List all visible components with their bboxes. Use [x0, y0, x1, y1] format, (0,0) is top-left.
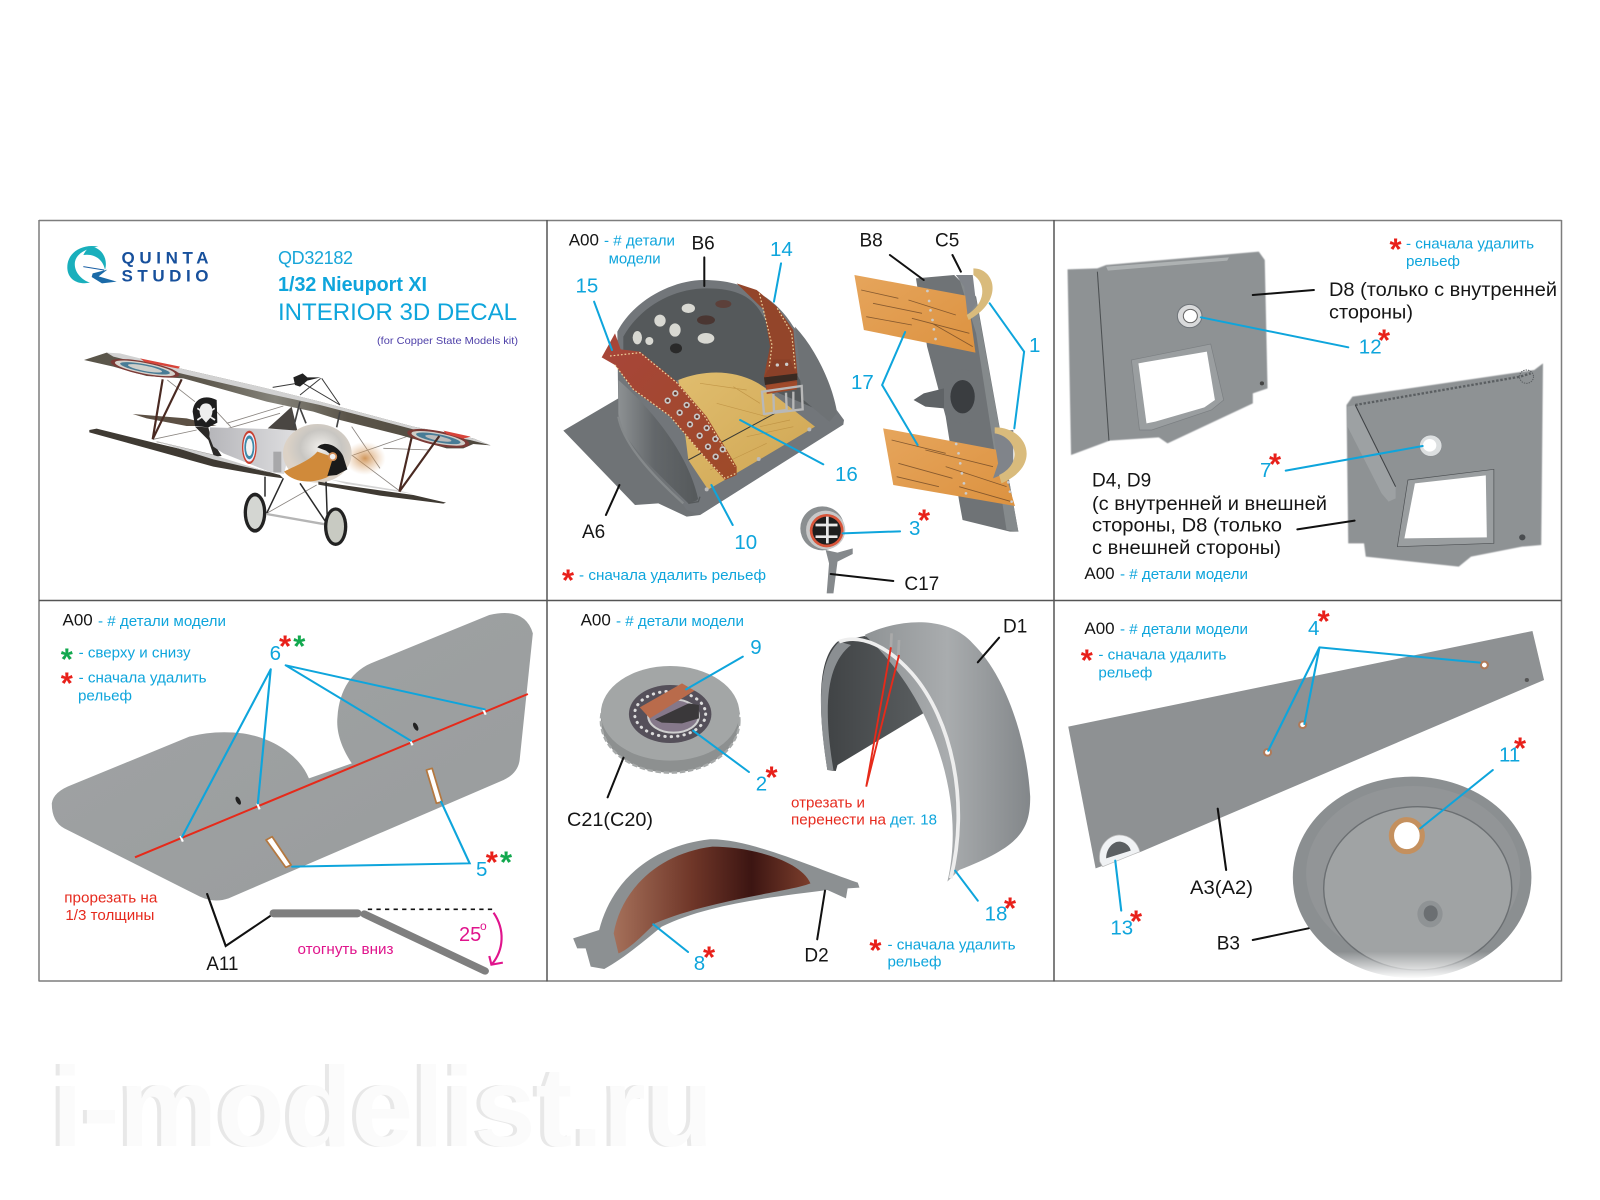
part labels: disc and cowl: * — [703, 940, 716, 974]
legend: remove relief first: * — [562, 562, 575, 598]
legend: part numbers note: A00 — [569, 231, 599, 250]
panel: seat, rudder bar, instrument — [562, 231, 1040, 597]
number: 5 with asterisks — [476, 844, 513, 881]
part labels: wing and round panel: B3 — [1217, 933, 1240, 954]
leader lines: panel callouts — [1201, 290, 1423, 529]
part labels: disc and cowl: 2 — [756, 773, 767, 796]
note: cut a third of thickness — [64, 890, 158, 924]
note: cut and transfer to part 18: дет. 18 — [890, 811, 937, 828]
legend: remove relief first — [869, 932, 1016, 971]
panel: title and aircraft — [67, 246, 518, 546]
legend: remove relief first: * — [1081, 642, 1094, 678]
label: D8 inner side: D8 (только с внутренней — [1329, 280, 1557, 301]
number: 5 with asterisks: * — [500, 844, 513, 880]
part labels: seat and rudder bar: 14 — [770, 238, 793, 261]
product code: QD32182 — [278, 248, 353, 268]
part labels: seat and rudder bar: 17 — [851, 371, 874, 394]
part labels: disc and cowl — [567, 617, 1027, 975]
note: bend down: отогнуть вниз — [298, 941, 394, 958]
legend: part numbers note: A00 — [1084, 619, 1115, 638]
part labels: wing and round panel: * — [1130, 904, 1143, 938]
legend: remove relief first: - сначала удалить рельеф — [579, 567, 766, 584]
number: 6 with asterisks — [270, 628, 306, 665]
legend: top and bottom — [61, 642, 191, 676]
panel: side panels D8 and D4, D9 — [1068, 232, 1557, 583]
legend: part numbers note — [62, 611, 226, 630]
part labels: wing and round panel: A3(A2) — [1190, 878, 1253, 899]
label: 25 degrees: 25 — [459, 924, 481, 946]
label: 25 degrees — [459, 919, 487, 946]
part labels: seat and rudder bar — [576, 231, 1040, 595]
note: cut a third of thickness: 1/3 толщины — [65, 907, 154, 924]
legend: part numbers note: A00 — [581, 611, 611, 630]
legend: remove relief first: - сначала удалить — [1098, 646, 1227, 663]
panel: parts A3, B3 — [1068, 604, 1544, 979]
part labels: wing and round panel — [1110, 604, 1527, 954]
legend: part numbers note — [1084, 564, 1248, 583]
legend: remove relief first — [61, 666, 207, 705]
legend: remove relief first — [1081, 642, 1227, 681]
legend: top and bottom: - сверху и снизу — [79, 645, 191, 662]
part labels: disc and cowl: D1 — [1003, 617, 1027, 638]
legend: remove relief first — [1390, 232, 1534, 270]
label: A11: A11 — [206, 954, 238, 975]
illustration: seat with straps — [563, 280, 844, 517]
part labels: disc and cowl: D2 — [804, 946, 829, 967]
legend: part numbers note: A00 — [1084, 564, 1115, 583]
illustration: A11 flat part with cut line — [52, 613, 533, 946]
illustration: round panel B3 — [1289, 777, 1534, 979]
label: D4, D9 both sides: D4, D9 — [1092, 471, 1151, 492]
illustration: rudder bar with wooden pedals — [854, 268, 1027, 532]
note: cut and transfer to part 18: перенести на — [791, 811, 887, 828]
number: 7 with asterisk: 7 — [1260, 459, 1271, 482]
logo: Quinta Studio: QUINTA — [122, 248, 208, 267]
number: 12 with asterisk: * — [1378, 322, 1391, 358]
legend: remove relief first: рельеф — [1406, 253, 1460, 270]
legend: remove relief first: - сначала удалить — [1406, 235, 1534, 252]
watermark: i-modelist.ru: i-modelist.ru — [48, 1044, 709, 1170]
part labels: disc and cowl: * — [766, 760, 779, 794]
number: 12 with asterisk — [1359, 322, 1391, 358]
illustration: cowl D1 — [821, 622, 1030, 901]
number: 12 with asterisk: 12 — [1359, 335, 1382, 358]
part labels: disc and cowl: 18 — [985, 903, 1007, 926]
part labels: seat and rudder bar: C5 — [935, 231, 959, 252]
panel: parts C21, D1, D2 — [567, 611, 1030, 975]
diagram: bend 25 degrees — [270, 909, 503, 971]
leader lines: wing and panel callouts — [1115, 647, 1493, 940]
logo: Quinta Studio: STUDIO — [122, 267, 208, 286]
illustration: wing strip A3 — [1068, 631, 1544, 868]
part labels: seat and rudder bar: 15 — [576, 274, 598, 297]
legend: remove relief first: рельеф — [888, 954, 942, 971]
number: 6 with asterisks: * — [293, 628, 306, 664]
legend: part numbers note: A00 — [62, 611, 93, 630]
part labels: disc and cowl: 8 — [694, 952, 705, 975]
legend: remove relief first: - сначала удалить — [79, 670, 207, 687]
legend: part numbers note — [581, 611, 744, 630]
panel: part A11 — [52, 611, 533, 975]
part labels: disc and cowl: 9 — [750, 636, 762, 659]
label: D4, D9 both sides: с внешней стороны) — [1092, 538, 1281, 559]
illustration: inner side panel — [1068, 252, 1268, 455]
part labels: seat and rudder bar: C17 — [904, 574, 939, 595]
legend: remove relief first: рельеф — [1098, 664, 1152, 681]
part labels: seat and rudder bar: 10 — [734, 531, 757, 554]
legend: remove relief first: - сначала удалить — [888, 936, 1016, 953]
label: D4, D9 both sides: стороны, D8 (только — [1092, 516, 1282, 537]
legend: part numbers note: - # детали модели — [98, 613, 226, 630]
legend: part numbers note — [569, 231, 675, 267]
part labels: disc and cowl: * — [1004, 890, 1017, 926]
illustration: instrument on stem — [800, 506, 853, 593]
legend: top and bottom: * — [61, 642, 74, 676]
illustration: Nieuport XI biplane — [84, 353, 491, 546]
illustration: headrest D2 — [573, 839, 859, 969]
legend: part numbers note — [1084, 619, 1248, 638]
number: 7 with asterisk: * — [1269, 446, 1282, 482]
part labels: seat and rudder bar: 16 — [835, 463, 858, 486]
part labels: seat and rudder bar: B6 — [692, 233, 715, 254]
note: cut and transfer to part 18 — [791, 794, 937, 828]
legend: remove relief first: * — [869, 932, 882, 968]
part labels: seat and rudder bar: B8 — [860, 231, 883, 252]
kit note: (for Copper State Models kit) — [377, 335, 518, 347]
label: D4, D9 both sides: (с внутренней и внешней — [1092, 494, 1327, 515]
label: D8 inner side — [1329, 280, 1557, 323]
product title: INTERIOR 3D DECAL — [278, 299, 517, 326]
legend: remove relief first: * — [61, 666, 74, 700]
part labels: wing and round panel: 13 — [1110, 916, 1133, 939]
label: D8 inner side: стороны) — [1329, 302, 1413, 323]
part labels: seat and rudder bar: * — [918, 502, 931, 538]
number: 6 with asterisks: * — [279, 628, 292, 664]
legend: part numbers note: - # детали модели — [1120, 566, 1248, 583]
note: cut and transfer to part 18: отрезать и — [791, 794, 865, 811]
part labels: disc and cowl: C21(C20) — [567, 810, 653, 831]
watermark: i-modelist.ru: i-modelist.ru — [52, 1044, 713, 1170]
number: 6 with asterisks: 6 — [270, 642, 281, 665]
legend: part numbers note: - # детали — [604, 233, 675, 250]
note: cut a third of thickness: прорезать на — [64, 890, 158, 907]
legend: part numbers note: модели — [609, 250, 661, 267]
part labels: wing and round panel: * — [1514, 730, 1527, 766]
legend: remove relief first: * — [1390, 232, 1403, 266]
illustration: outer side panel — [1346, 363, 1543, 567]
number: 5 with asterisks: * — [486, 844, 499, 880]
part labels: seat and rudder bar: A6 — [582, 522, 605, 543]
model title: 1/32 Nieuport XI — [278, 274, 427, 296]
legend: part numbers note: - # детали модели — [1120, 621, 1248, 638]
legend: part numbers note: - # детали модели — [616, 613, 744, 630]
part labels: seat and rudder bar: 3 — [909, 517, 920, 540]
part labels: wing and round panel: * — [1318, 604, 1331, 638]
legend: remove relief first: рельеф — [78, 688, 132, 705]
number: 7 with asterisk — [1260, 446, 1282, 482]
leader lines: seat part numbers — [594, 255, 1024, 581]
number: 5 with asterisks: 5 — [476, 858, 487, 881]
logo: Quinta Studio — [67, 246, 208, 286]
legend: remove relief first — [562, 562, 766, 598]
illustration: control disc C21 — [601, 657, 749, 797]
part labels: wing and round panel: 11 — [1499, 744, 1520, 767]
part labels: seat and rudder bar: 1 — [1029, 334, 1040, 357]
label: 25 degrees: o — [480, 919, 487, 933]
label: D4, D9 both sides — [1092, 471, 1327, 559]
part labels: wing and round panel: 4 — [1308, 617, 1319, 640]
